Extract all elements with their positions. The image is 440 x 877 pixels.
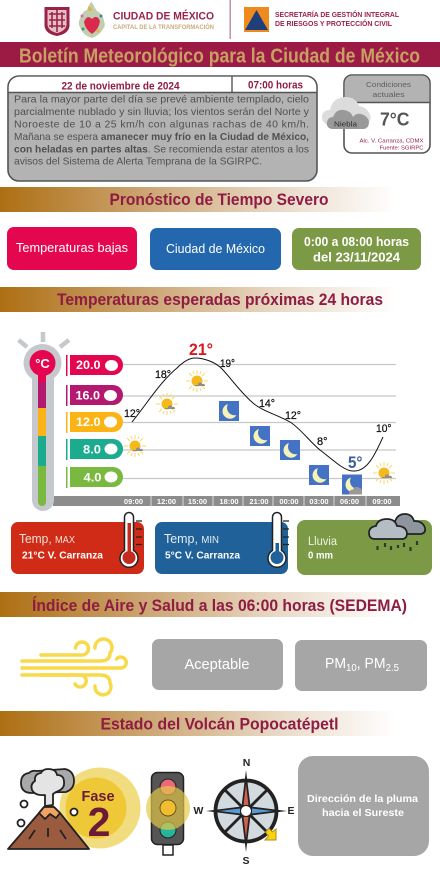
- icon: thermometer cold: [268, 512, 289, 567]
- time axis: 15:00: [188, 497, 207, 506]
- temperature labels: 19°: [220, 358, 235, 370]
- panel: severe weather time: 0:00 a 08:00 horas: [304, 235, 409, 249]
- value: 0 mm: [308, 550, 333, 562]
- temperature labels: 18°: [155, 369, 171, 381]
- body text: [14, 94, 310, 168]
- section heading: air quality: Índice de Aire y Salud a las 06:00 horas (SEDEMA): [32, 596, 407, 615]
- header logos: [44, 0, 399, 39]
- section heading: severe weather: Pronóstico de Tiempo Severo: [110, 190, 328, 209]
- heading: [366, 82, 412, 99]
- body text: Para la mayor parte del día se prevé ambiente templado, cielo: [14, 94, 309, 106]
- panel: severe weather phenomenon: [7, 227, 137, 270]
- value: 5°C V. Carranza: [165, 550, 240, 562]
- icon: floral heart: [79, 2, 105, 38]
- panel: current conditions: [322, 75, 430, 153]
- panel: severe weather location: [150, 228, 281, 270]
- date row: [8, 76, 317, 92]
- body text: Mañana se espera amanecer muy frío en la Ciudad de México,: [14, 131, 309, 143]
- thermometer scale: [18, 332, 69, 511]
- icon: civil protection: [244, 7, 269, 32]
- icon: wind: [22, 639, 126, 695]
- panel: min temperature: [155, 512, 289, 574]
- source: [360, 138, 424, 152]
- label: Fase: [82, 788, 114, 805]
- chart: 24 hour temperature: [18, 332, 400, 511]
- body text: parcialmente nublado y sin lluvia; los vientos serán del Norte y: [14, 106, 310, 118]
- icon: compass: [194, 757, 295, 867]
- icon: compass: W: [194, 805, 204, 817]
- time axis: 21:00: [249, 497, 269, 506]
- panel: plume direction: [298, 756, 429, 856]
- label: Temp, MAX: [19, 531, 75, 546]
- time: 07:00 horas: [248, 80, 303, 92]
- source: Alc. V. Carranza, CDMX: [360, 138, 424, 144]
- text: Capital de la transformación: CAPITAL DE LA TRANSFORMACIÓN: [113, 22, 214, 31]
- heading: actuales: [372, 92, 405, 99]
- value: 21°C V. Carranza: [22, 550, 103, 562]
- icon: compass: N: [243, 757, 250, 769]
- heading: Condiciones: [366, 82, 412, 89]
- section heading: severe weather: [0, 187, 440, 212]
- body text: avisos del Sistema de Alerta Temprana de la SGIRPC.: [14, 156, 262, 168]
- scale pills: 12.0: [76, 415, 101, 429]
- icon: rain clouds: [369, 514, 425, 551]
- panel: severe weather phenomenon: Temperaturas bajas: [16, 240, 128, 255]
- temperature curve: [132, 358, 383, 471]
- body text: con heladas en partes altas. Se recomienda estar atentos a los: [14, 144, 309, 156]
- icon: volcano: [8, 769, 89, 849]
- icon: thermometer hot: [120, 512, 142, 567]
- minimum label: 5°: [348, 454, 362, 472]
- time axis: [53, 496, 400, 506]
- scale pills: 20.0: [76, 358, 101, 372]
- label: Niebla: [334, 120, 358, 128]
- section heading: expected temperatures: [0, 287, 440, 312]
- body text: Noroeste de 10 a 25 km/h con algunas rachas de 40 km/h.: [14, 119, 309, 131]
- panel: severe weather location: Ciudad de México: [166, 241, 265, 256]
- panel: air quality value: [152, 639, 283, 690]
- icon: traffic light: [146, 772, 190, 855]
- weather icons: [124, 370, 395, 494]
- panel: pollutants: [295, 640, 427, 691]
- panel: rain: [297, 514, 432, 575]
- maximum label: 21°: [189, 341, 213, 359]
- panel: air quality value: Aceptable: [184, 657, 250, 673]
- scale pills: 4.0: [84, 470, 102, 484]
- heading: Ciudad de México: CIUDAD DE MÉXICO: [113, 10, 214, 22]
- panel: pollutants: 2.5: [386, 663, 399, 674]
- panel: bulletin text: [8, 76, 317, 181]
- panel: plume direction: hacia el Sureste: [322, 808, 404, 819]
- temperature labels: 10°: [376, 423, 392, 435]
- temperature labels: 8°: [317, 436, 328, 448]
- section heading: volcano: [0, 711, 440, 736]
- icon: compass: S: [242, 855, 250, 867]
- label: Lluvia: [308, 536, 338, 548]
- source: Fuente: SGIRPC: [380, 146, 424, 152]
- panel: plume direction: Dirección de la pluma: [307, 794, 418, 805]
- scale pills: [66, 355, 123, 488]
- thermometer scale: °C: [35, 356, 50, 371]
- direction arrow: [265, 828, 276, 840]
- time axis: 18:00: [219, 497, 239, 506]
- icon: phase badge: [60, 768, 140, 848]
- time axis: 06:00: [340, 497, 359, 506]
- panel: severe weather time: [292, 228, 421, 270]
- temperature labels: 14°: [259, 398, 275, 410]
- temperature: 7°C: [380, 108, 410, 130]
- text: Secretaría: [275, 10, 399, 28]
- time axis: 03:00: [309, 497, 329, 506]
- number: 2: [88, 799, 110, 845]
- temperature labels: 12°: [285, 410, 301, 422]
- time axis: 00:00: [279, 497, 299, 506]
- text: Secretaría: SECRETARÍA DE GESTIÓN INTEGRAL: [275, 10, 399, 19]
- date: 22 de noviembre de 2024: [62, 80, 180, 92]
- panel: severe weather time: del 23/11/2024: [313, 250, 400, 264]
- icon: city shield: [44, 7, 70, 36]
- text: Secretaría: DE RIESGOS Y PROTECCIÓN CIVIL: [275, 19, 393, 28]
- panel: pollutants: , PM: [357, 656, 386, 672]
- scale pills: 16.0: [76, 388, 100, 402]
- time axis: 09:00: [372, 497, 392, 506]
- panel: max temperature: [11, 512, 144, 574]
- time axis: 09:00: [124, 497, 143, 506]
- section heading: volcano: Estado del Volcán Popocatépetl: [100, 714, 338, 734]
- label: Temp, MIN: [164, 531, 219, 546]
- section heading: expected temperatures: Temperaturas esperadas próximas 24 horas: [57, 290, 383, 309]
- icon: compass: E: [287, 805, 295, 817]
- temperature labels: [124, 358, 392, 448]
- temperature labels: 12°: [124, 408, 140, 420]
- time axis: 12:00: [157, 497, 176, 506]
- panel: pollutants: PM: [325, 656, 347, 672]
- scale pills: 8.0: [83, 442, 101, 456]
- panel: pollutants: 10: [346, 663, 357, 674]
